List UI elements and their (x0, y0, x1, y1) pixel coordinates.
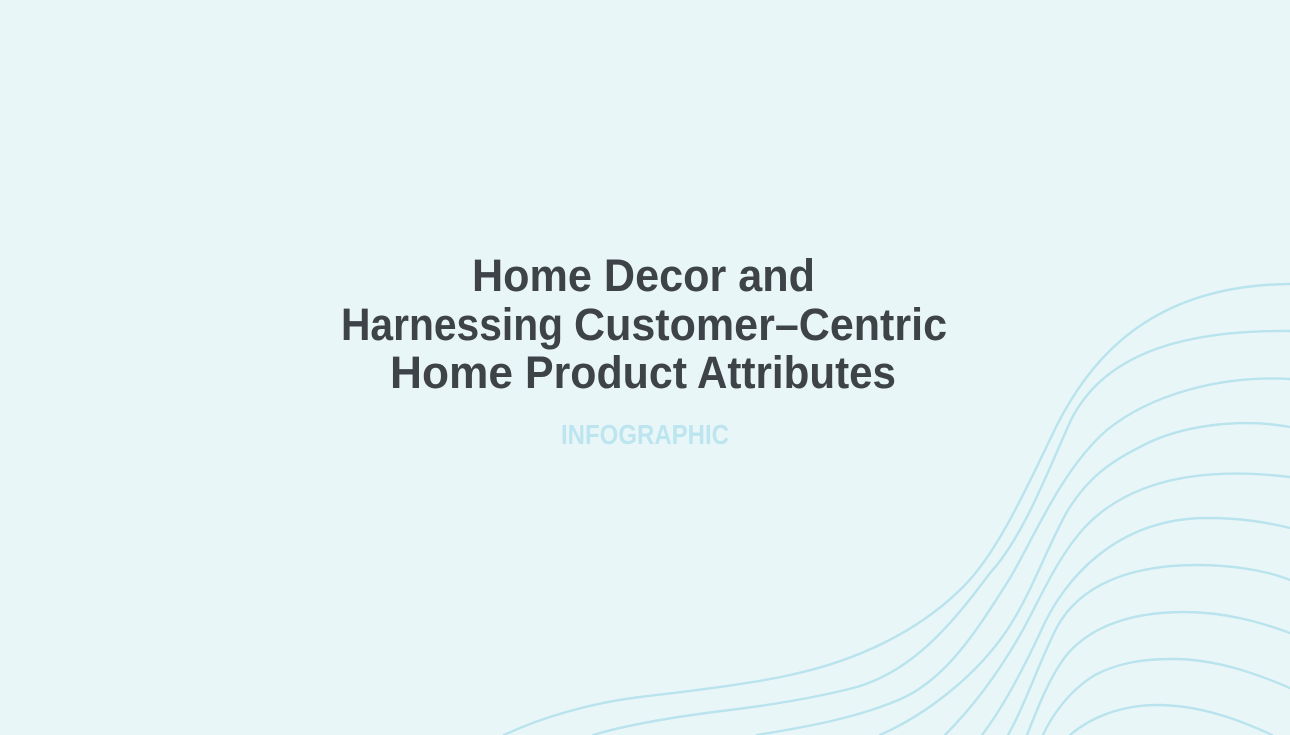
title (341, 250, 947, 398)
title: Customer–Centric (574, 299, 947, 350)
title: Home Decor and (472, 250, 815, 301)
title: Product (525, 347, 687, 398)
title: Harnessing (341, 299, 563, 350)
title: Home (390, 347, 513, 398)
title: Attributes (697, 347, 896, 398)
subtitle: infographic label: INFOGRAPHIC (561, 419, 729, 450)
decorative wave lines (504, 284, 1290, 735)
